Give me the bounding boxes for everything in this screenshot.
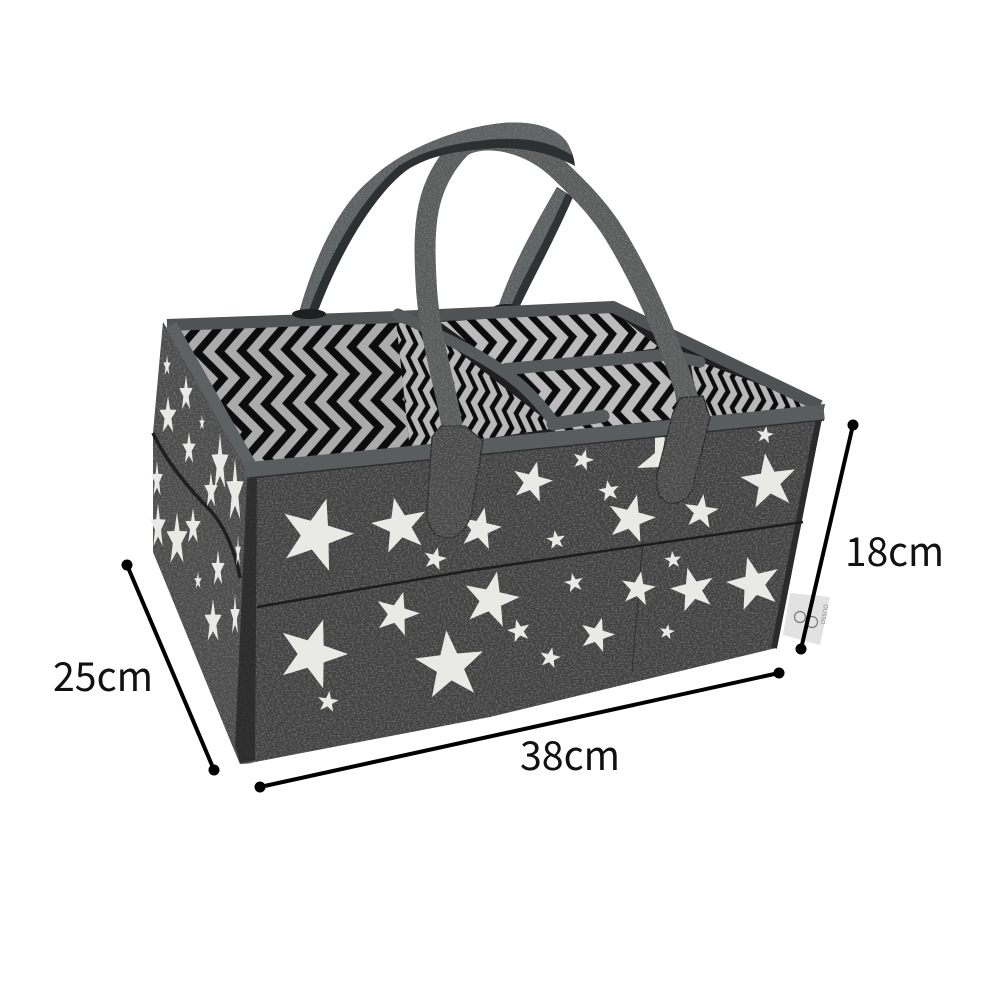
right arm base [493,304,521,312]
dimension: width 38cm [254,668,784,792]
front panel [235,404,825,764]
tag: OUSSO [818,604,831,626]
inner dividers [398,314,700,424]
back handle arch [292,122,575,319]
left handle tab [427,426,483,538]
top rim [171,325,824,478]
dimension: depth 25cm: 25cm [53,645,153,703]
lining: back right wall [440,310,660,368]
left corner seam [235,478,257,763]
interior lining [170,305,822,470]
left arm base [292,309,326,319]
pocket opening line [257,522,803,607]
dimension: width 38cm: 38cm [520,724,620,782]
lining: front middle wall [508,356,680,432]
moon star fragment [637,432,665,468]
side panel [150,322,252,764]
dimension: depth 25cm [53,560,220,776]
lining: middle divider wall [396,320,556,450]
front handle [425,140,710,538]
right corner seam [774,418,819,648]
tag [783,593,831,645]
side stars [150,355,244,641]
right handle tab [657,396,710,503]
back handle right arm [493,187,573,312]
dimension: height 18cm: 18cm [845,520,944,578]
pocket divider seam [632,540,643,672]
back rim [167,307,820,406]
lining: left wall [172,318,410,470]
dimension: height 18cm [796,420,944,654]
stars on front panel [270,425,800,712]
side pocket edge [153,433,240,578]
lining: right wall [690,358,822,425]
